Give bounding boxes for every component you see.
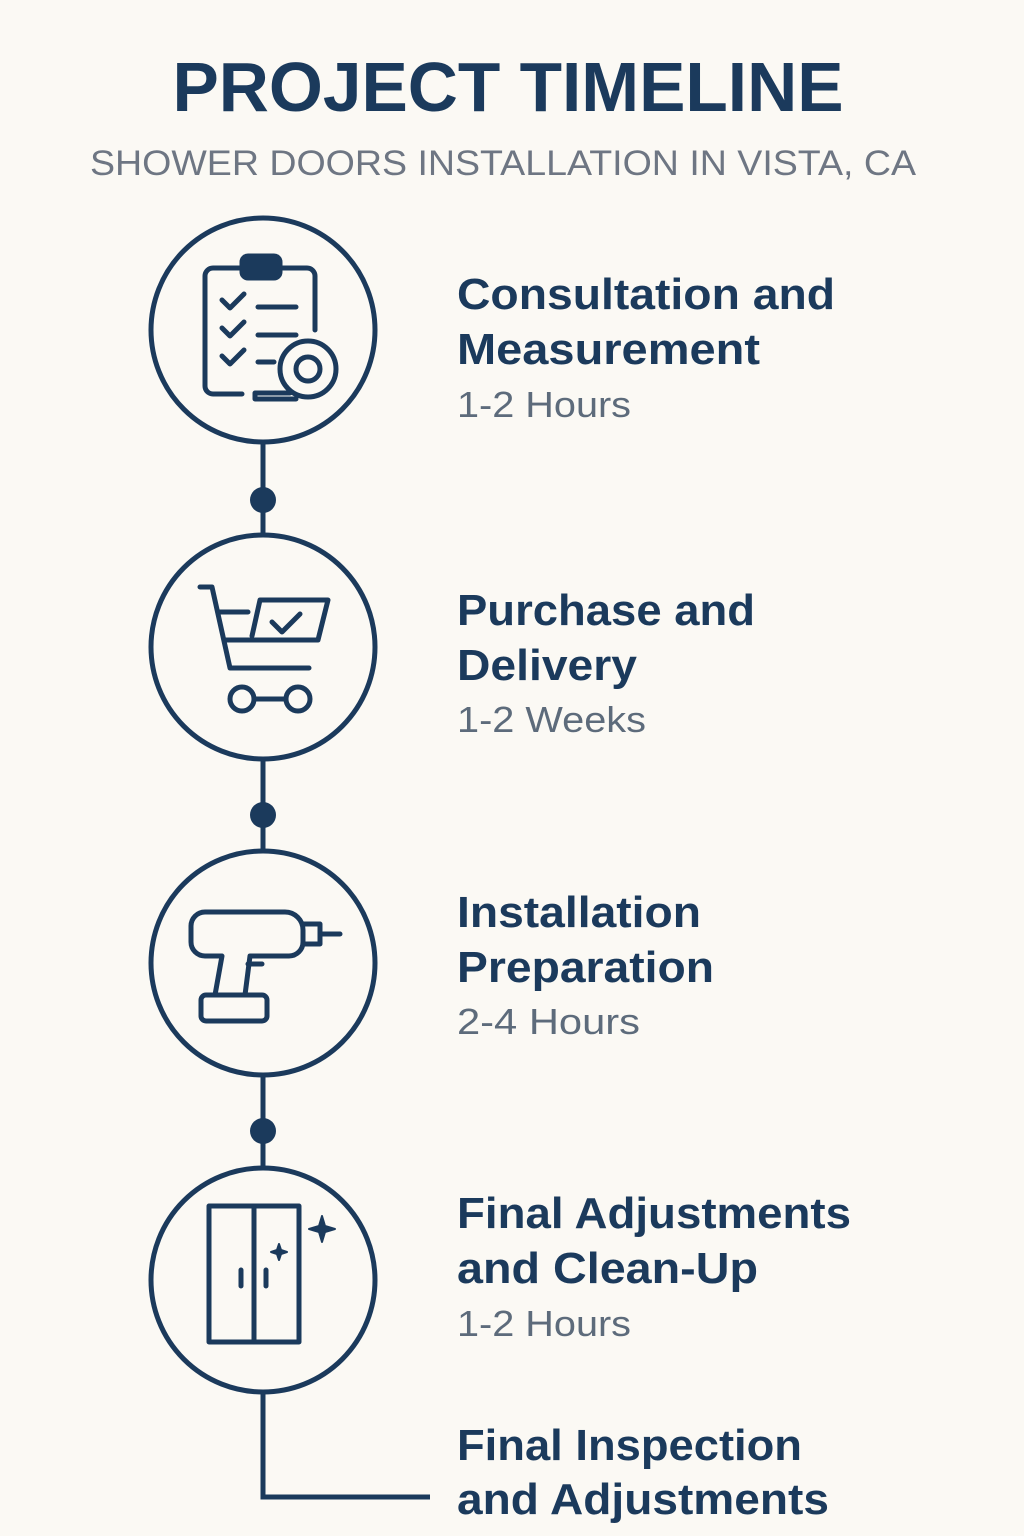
step 4 text [457, 1189, 851, 1344]
step 3 text: 2-4 Hours [457, 1001, 640, 1042]
title: PROJECT TIMELINE [172, 48, 844, 126]
step 1 text: Measurement [457, 325, 760, 374]
step 5 text [457, 1421, 829, 1524]
step 2 icon: shopping cart [151, 535, 375, 759]
step 4 text: 1-2 Hours [457, 1303, 631, 1344]
step 4 icon: shower door with sparkles [151, 1168, 375, 1392]
step 3 icon: drill [151, 851, 375, 1075]
step 4 text: Final Adjustments [457, 1189, 851, 1238]
step 3 text [457, 888, 714, 1042]
step 1 text: Consultation and [457, 270, 835, 319]
step 3 text: Preparation [457, 943, 714, 992]
step 2 text [457, 586, 755, 740]
timeline dots [250, 487, 276, 1144]
step 1 text: 1-2 Hours [457, 384, 631, 425]
subtitle: SHOWER DOORS INSTALLATION IN VISTA, CA [90, 144, 917, 183]
step 2 text: 1-2 Weeks [457, 699, 646, 740]
step 4 text: and Clean-Up [457, 1244, 758, 1293]
step 2 text: Purchase and [457, 586, 755, 635]
step 3 text: Installation [457, 888, 701, 937]
step 1 text [457, 270, 835, 425]
step 2 text: Delivery [457, 641, 638, 690]
step 5 text: Final Inspection [457, 1421, 802, 1470]
timeline connector [263, 443, 430, 1497]
step 5 text: and Adjustments [457, 1475, 829, 1524]
step 1 icon: clipboard with tape measure [151, 218, 375, 442]
